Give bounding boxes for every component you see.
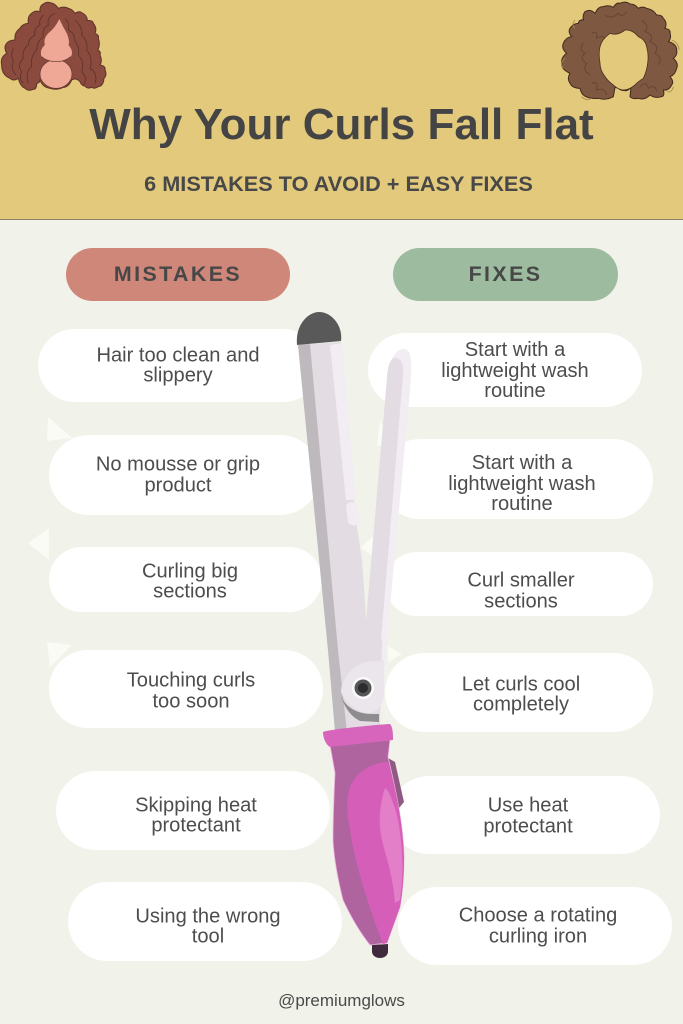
icon: long curly hair woman	[0, 2, 106, 91]
mistakes heading	[66, 248, 290, 301]
mistake 5	[56, 771, 330, 850]
fix 6: Choose a rotating	[459, 904, 617, 926]
fixes heading: FIXES	[469, 262, 542, 286]
mistake 5: protectant	[151, 814, 241, 836]
fix 1: Start with a	[465, 339, 565, 361]
fix 1: lightweight wash	[441, 360, 589, 382]
fix 1	[368, 333, 642, 407]
mistake 4	[49, 650, 323, 728]
barrel cap	[297, 312, 341, 345]
fix 4	[385, 653, 653, 732]
fix 6: curling iron	[489, 925, 587, 947]
fix 2: routine	[491, 493, 553, 515]
mistake 1: Hair too clean and	[96, 344, 260, 366]
mistake 2: product	[144, 474, 212, 496]
handle tip	[372, 944, 388, 958]
pivot joint	[341, 660, 384, 722]
barrel	[298, 342, 382, 732]
fix 6	[398, 887, 672, 965]
mistake 5: Skipping heat	[135, 794, 257, 816]
fix 4: Let curls cool	[462, 673, 580, 695]
fix 5: protectant	[483, 815, 573, 837]
fix 4: completely	[473, 694, 569, 716]
icon: afro curly hair	[561, 2, 680, 100]
footer credit: @premiumglows	[278, 991, 405, 1010]
fix 3: sections	[484, 590, 558, 612]
fix 3	[385, 552, 653, 616]
fix 1: routine	[484, 380, 546, 402]
mistake 3: sections	[153, 580, 227, 602]
handle button	[388, 758, 404, 808]
panel: mistakes list	[38, 329, 342, 961]
fix 2: lightweight wash	[448, 473, 596, 495]
fix 5: Use heat	[488, 794, 568, 816]
fix 3: Curl smaller	[467, 569, 575, 591]
mistake 6	[68, 882, 342, 961]
mistake 4: too soon	[152, 690, 230, 712]
mistake 3: Curling big	[142, 560, 238, 582]
handle	[323, 724, 404, 958]
header band	[0, 0, 683, 220]
mistake 1: slippery	[143, 364, 213, 386]
mistake 1	[38, 329, 320, 402]
mistake 6: tool	[192, 926, 224, 948]
fix 2	[380, 439, 653, 519]
clamp arm	[365, 349, 411, 690]
panel: fixes list	[368, 333, 672, 965]
mistake 2	[49, 435, 320, 515]
fix 2: Start with a	[472, 452, 572, 474]
mistake 6: Using the wrong	[135, 905, 281, 927]
fixes heading	[393, 248, 618, 301]
mistake 3	[49, 547, 322, 612]
mistake 4: Touching curls	[127, 669, 255, 691]
mistakes heading: MISTAKES	[114, 262, 242, 286]
fix 5	[390, 776, 660, 854]
mistake 2: No mousse or grip	[96, 453, 260, 475]
subtitle: 6 MISTAKES TO AVOID + EASY FIXES	[144, 171, 533, 196]
title: Why Your Curls Fall Flat	[89, 100, 594, 149]
